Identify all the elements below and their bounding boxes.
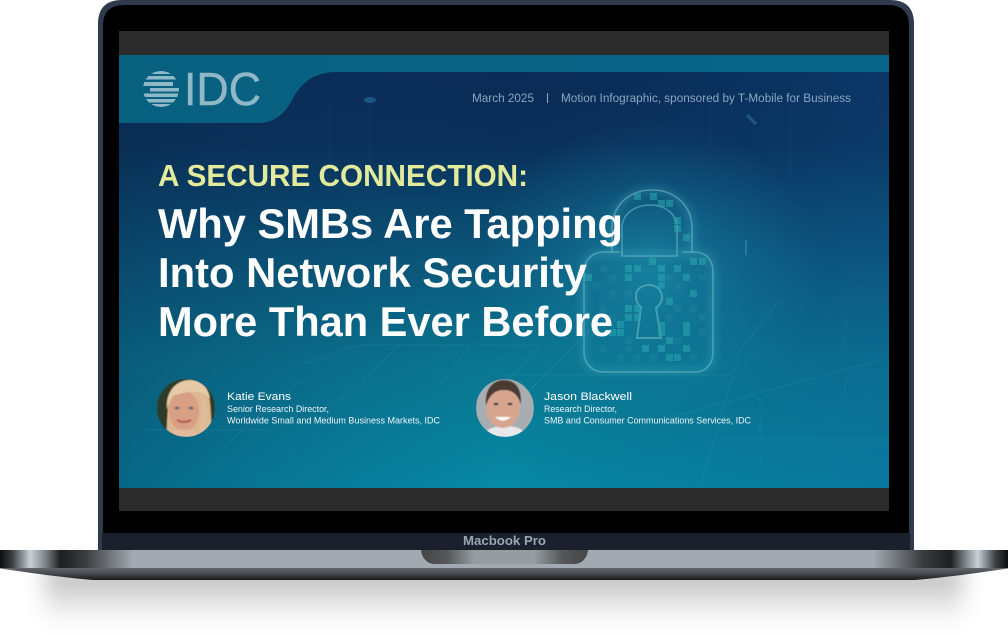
report date: March 2025	[472, 93, 534, 105]
screen letterbox	[119, 31, 889, 511]
model label: Macbook Pro	[463, 534, 546, 548]
name: Jason Blackwell: Jason Blackwell	[544, 391, 632, 403]
title heading	[158, 208, 620, 336]
role: Katie Evans: Worldwide Small and Medium Business Markets, IDC	[227, 416, 441, 426]
title eyebrow: A SECURE CONNECTION:	[158, 158, 528, 193]
portrait: Jason Blackwell	[476, 379, 534, 437]
sponsor line: Motion Infographic, sponsored by T-Mobile for Business	[561, 93, 851, 105]
slide	[119, 55, 889, 488]
title heading: More Than Ever Before	[158, 298, 613, 345]
author: Jason Blackwell	[476, 379, 751, 437]
role: Jason Blackwell: SMB and Consumer Communications Services, IDC	[544, 416, 751, 426]
padlock outline	[584, 190, 713, 372]
role: Katie Evans: Senior Research Director,	[227, 404, 329, 414]
icon: padlock	[584, 190, 713, 372]
laptop lid	[98, 0, 914, 550]
role: Jason Blackwell: Research Director,	[544, 404, 617, 414]
base lower edge	[0, 568, 1008, 580]
logo wordmark: IDC	[184, 63, 261, 115]
title heading: Why SMBs Are Tapping	[158, 200, 623, 247]
laptop base	[0, 550, 1008, 580]
circuit background lines	[140, 95, 889, 488]
logo globe	[143, 71, 180, 107]
author: Katie Evans	[157, 379, 441, 437]
trackpad notch	[421, 550, 588, 564]
padlock data squares	[585, 193, 706, 361]
title heading: Into Network Security	[158, 249, 588, 296]
idc logo	[143, 71, 260, 107]
role: Katie Evans	[227, 404, 441, 426]
desk shadow	[45, 568, 963, 624]
portrait: Katie Evans	[157, 379, 215, 437]
header band	[119, 55, 889, 123]
name: Katie Evans: Katie Evans	[227, 391, 292, 403]
role: Jason Blackwell	[544, 404, 751, 426]
title	[158, 158, 623, 345]
